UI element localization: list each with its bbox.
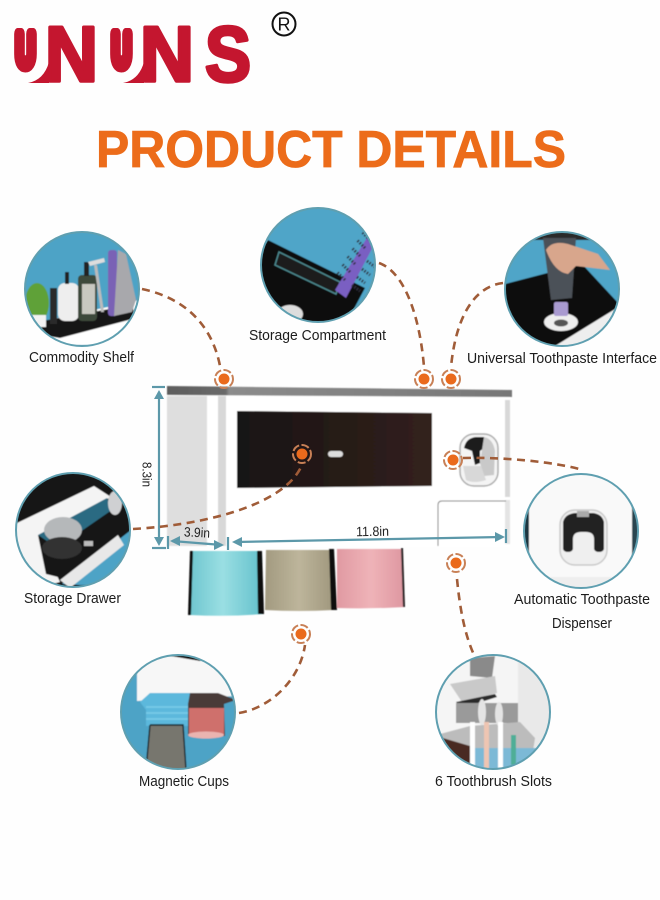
- label: automatic toothpaste dispenser: Automatic Toothpaste: [514, 592, 650, 608]
- logo: UNUNS: U: [16, 24, 35, 76]
- dimension: height 8.3in: 8.3in: [140, 462, 154, 487]
- panel: magnetic cups: [121, 655, 236, 770]
- title: PRODUCT DETAILS: [96, 121, 566, 179]
- tan cup: [265, 549, 337, 611]
- panel: commodity shelf: [25, 232, 140, 346]
- marker: drawer: [293, 445, 311, 463]
- label: universal toothpaste interface: Universal Toothpaste Interface: [467, 351, 657, 367]
- logo: UNUNS: S: [205, 10, 251, 98]
- label: toothbrush slots: 6 Toothbrush Slots: [435, 774, 552, 790]
- logo: UNUNS: N: [45, 10, 98, 98]
- label: storage drawer: Storage Drawer: [24, 591, 121, 607]
- connector: automatic dispenser: [463, 458, 583, 470]
- marker: toothbrush slots: [447, 554, 465, 572]
- panel: automatic toothpaste dispenser: [524, 474, 639, 589]
- panel: toothbrush slots: [436, 655, 552, 770]
- logo: UNUNS: [16, 10, 296, 98]
- panel: storage drawer: [15, 473, 131, 590]
- top shelf: [167, 386, 512, 397]
- dimension: height 8.3in: [140, 387, 166, 548]
- dimension: depth 3.9in: 3.9in: [184, 524, 210, 541]
- marker: shelf: [215, 370, 233, 388]
- label: automatic toothpaste dispenser: Dispenser: [552, 616, 612, 632]
- registered mark: [272, 12, 296, 36]
- connector: storage compartment: [379, 263, 424, 367]
- marker: cups: [292, 625, 310, 643]
- label: automatic toothpaste dispenser: [514, 592, 650, 632]
- dimension: width 11.8in: [232, 524, 506, 547]
- panel slot: [328, 451, 343, 457]
- connector: storage drawer: [133, 465, 302, 529]
- black front panel: [237, 411, 432, 488]
- panel: universal toothpaste interface: [505, 232, 620, 347]
- connector: magnetic cups: [239, 645, 305, 713]
- connector: toothbrush slots: [457, 579, 474, 655]
- dispenser body: [167, 394, 510, 547]
- marker: interface: [442, 370, 460, 388]
- label: commodity shelf: Commodity Shelf: [29, 350, 135, 366]
- marker: compartment: [415, 370, 433, 388]
- toothpaste squeezer: [460, 434, 498, 486]
- label: storage compartment: Storage Compartment: [249, 328, 386, 344]
- registered mark: R: [278, 14, 290, 34]
- label: magnetic cups: Magnetic Cups: [139, 774, 229, 790]
- connector: universal interface: [451, 283, 503, 367]
- pink cup: [337, 548, 405, 608]
- blue cup: [188, 551, 264, 616]
- dimension: width 11.8in: 11.8in: [356, 524, 389, 539]
- panel: storage compartment: [261, 208, 376, 323]
- logo: UNUNS: U: [112, 24, 131, 76]
- product: wall dispenser: [167, 386, 512, 616]
- logo: UNUNS: N: [140, 10, 194, 98]
- drawer outline: [438, 501, 506, 546]
- dimension: depth 3.9in: [168, 524, 228, 550]
- connector: commodity shelf: [142, 289, 220, 366]
- marker: dispenser: [444, 451, 462, 469]
